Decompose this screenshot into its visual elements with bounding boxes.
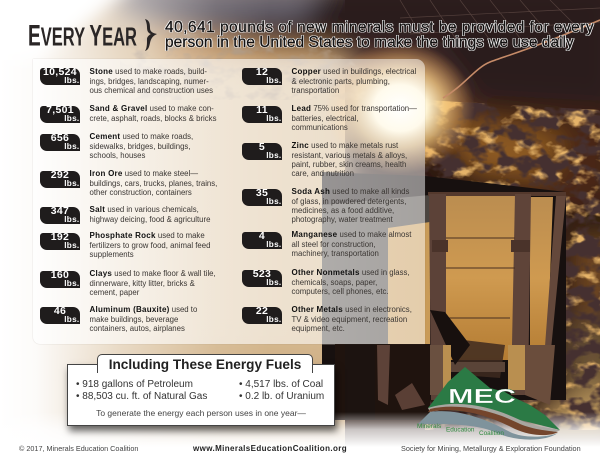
row: aluminum: Aluminum (Bauxite) used to — [90, 305, 197, 314]
row: cement: sidewalks, bridges, buildings, — [90, 142, 190, 150]
row: other metals: TV & video equipment, recreation — [292, 314, 407, 324]
row: other nonmetals: computers, cell phones, etc. — [292, 287, 389, 296]
footer: copyright: © 2017, Minerals Education Coalition — [19, 444, 138, 452]
row: copper: Copper used in buildings, electrical — [292, 67, 416, 76]
row: soda ash: 35 — [256, 187, 268, 199]
row: iron ore: lbs. — [64, 179, 80, 188]
row: phosphate rock — [40, 231, 210, 259]
logo tagline: Minerals — [417, 423, 441, 430]
row: other nonmetals: Other Nonmetals used in glass, — [292, 268, 410, 277]
row: aluminum: containers, autos, airplanes — [90, 324, 185, 333]
row: manganese: lbs. — [266, 240, 282, 249]
row: manganese: all steel for construction, — [292, 240, 376, 248]
row: other nonmetals: chemicals, soaps, paper, — [292, 278, 377, 286]
heading text: 40,641 pounds of new minerals must be provided for every — [165, 18, 594, 36]
row: cement: schools, houses — [90, 151, 145, 160]
row: stone: 10,524 — [43, 66, 77, 78]
row: soda ash: lbs. — [266, 197, 282, 206]
row: other nonmetals — [242, 268, 410, 296]
cart — [322, 172, 566, 400]
row: salt: 347 — [51, 205, 69, 217]
fuel list right — [239, 378, 324, 402]
row: aluminum: 46 — [54, 305, 66, 317]
icon: bracket — [145, 19, 157, 51]
row: iron ore — [40, 169, 217, 197]
row: lead — [242, 104, 417, 132]
row: phosphate rock: Phosphate Rock used to make — [90, 231, 205, 240]
row: clays: dinnerware, kitty litter, bricks & — [90, 278, 195, 288]
panel: energy fuels — [64, 354, 342, 436]
row: cement: Cement used to make roads, — [90, 132, 193, 141]
row: sand and gravel: Sand & Gravel used to make con- — [90, 104, 214, 113]
rock texture — [425, 100, 600, 430]
row: lead: communications — [292, 123, 348, 132]
energy note: To generate the energy each person uses in one year— — [96, 408, 306, 418]
row: aluminum: make buildings, beverage — [90, 314, 178, 324]
row: clays: 160 — [51, 269, 69, 281]
row: sand and gravel — [40, 104, 216, 123]
row: copper: lbs. — [266, 76, 282, 85]
row: manganese — [242, 230, 412, 258]
row: salt: Salt used in various chemicals, — [90, 205, 199, 214]
row: manganese: Manganese used to make almost — [292, 230, 411, 239]
footer: society: Society for Mining, Metallurgy & Exploration Foundation — [401, 444, 581, 452]
fuel list left: • 88,503 cu. ft. of Natural Gas — [76, 391, 207, 402]
fuel list left: • 918 gallons of Petroleum — [76, 378, 193, 390]
energy heading tab: Including These Energy Fuels — [109, 357, 301, 372]
row: phosphate rock: lbs. — [64, 241, 80, 250]
row: cement: lbs. — [64, 142, 80, 151]
panel: minerals list: care, and nutrition — [292, 169, 354, 178]
panel: minerals list — [33, 59, 425, 344]
row: clays: lbs. — [64, 279, 80, 288]
logo tagline: Education — [446, 426, 475, 434]
row: phosphate rock: fertilizers to grow food, animal feed — [90, 240, 210, 250]
row: aluminum: lbs. — [64, 315, 80, 324]
row: soda ash: of glass, in powdered detergents, — [292, 196, 406, 206]
row: other metals — [242, 305, 412, 333]
row: salt: lbs. — [64, 215, 80, 224]
logo wordmark: MEC — [448, 385, 516, 408]
heading text — [164, 18, 594, 51]
row: soda ash — [242, 187, 410, 224]
row: soda ash: medicines, as a food additive, — [292, 206, 394, 215]
row: lead: lbs. — [266, 114, 282, 123]
logo: MEC — [417, 367, 560, 440]
row: other metals: lbs. — [266, 315, 282, 324]
row: zinc: 5 — [259, 141, 265, 153]
row: clays: Clays used to make floor & wall tile, — [90, 269, 216, 278]
row: clays: cement, paper — [90, 288, 139, 297]
row: other metals: Other Metals used in electronics, — [292, 305, 412, 314]
row: lead: Lead 75% used for transportation— — [292, 104, 417, 113]
row: zinc: resistant, various metals & alloys, — [292, 150, 407, 160]
row: lead: batteries, electrical, — [292, 114, 359, 122]
row: other metals: equipment, etc. — [292, 324, 345, 333]
row: iron ore: Iron Ore used to make steel— — [90, 169, 198, 178]
energy box body — [67, 364, 335, 426]
logo tagline: Coalition — [479, 430, 504, 437]
row: sand and gravel: crete, asphalt, roads, blocks & bricks — [90, 114, 216, 122]
row: cement: 656 — [51, 132, 69, 144]
row: copper — [242, 66, 416, 95]
row: zinc: Zinc used to make metals rust — [292, 141, 398, 150]
row: clays — [40, 269, 216, 297]
row: copper: 12 — [256, 66, 268, 78]
row: other nonmetals: lbs. — [266, 278, 282, 287]
footer: website: www.MineralsEducationCoalition.org — [193, 444, 347, 452]
row: other nonmetals: 523 — [253, 268, 271, 280]
row: salt — [40, 205, 210, 224]
row: soda ash: Soda Ash used to make all kinds — [292, 187, 409, 196]
row: cement — [40, 132, 193, 160]
row: aluminum — [40, 305, 197, 333]
row: zinc: paint, rubber, skin creams, health — [292, 160, 406, 169]
row: iron ore: other construction, containers — [90, 188, 192, 197]
row: iron ore: 292 — [51, 169, 69, 181]
row: phosphate rock: 192 — [51, 231, 69, 243]
row: zinc: lbs. — [266, 151, 282, 160]
row: sand and gravel: lbs. — [64, 114, 80, 123]
row: sand and gravel: 7,501 — [46, 104, 74, 116]
row: manganese: 4 — [259, 230, 265, 242]
row: iron ore: buildings, cars, trucks, planes, trains, — [90, 178, 217, 188]
heading text: person in the United States to make the things we use daily — [165, 34, 574, 51]
left floor tan — [0, 0, 345, 464]
row: salt: highway deicing, food & agriculture — [90, 214, 210, 224]
row: manganese: machinery, transportation — [292, 249, 379, 258]
row: stone: ous chemical and construction uses — [90, 86, 213, 95]
row: copper: & electronic parts, plumbing, — [292, 76, 390, 86]
fuel list right: • 0.2 lb. of Uranium — [239, 391, 324, 402]
row: zinc — [242, 141, 407, 178]
row: lead: 11 — [256, 104, 268, 116]
row: copper: transportation — [292, 86, 339, 95]
row: stone: ings, bridges, landscaping, numer- — [90, 76, 209, 86]
row: stone — [40, 66, 213, 95]
row: stone: Stone used to make roads, build- — [90, 67, 207, 76]
panel: minerals list: photography, water treatment — [292, 215, 393, 224]
fuel list left — [76, 378, 207, 402]
row: other metals: 22 — [256, 305, 268, 317]
row: phosphate rock: supplements — [90, 250, 134, 259]
row: stone: lbs. — [64, 76, 80, 85]
ceiling mesh — [400, 0, 600, 50]
fuel list right: • 4,517 lbs. of Coal — [239, 378, 323, 390]
